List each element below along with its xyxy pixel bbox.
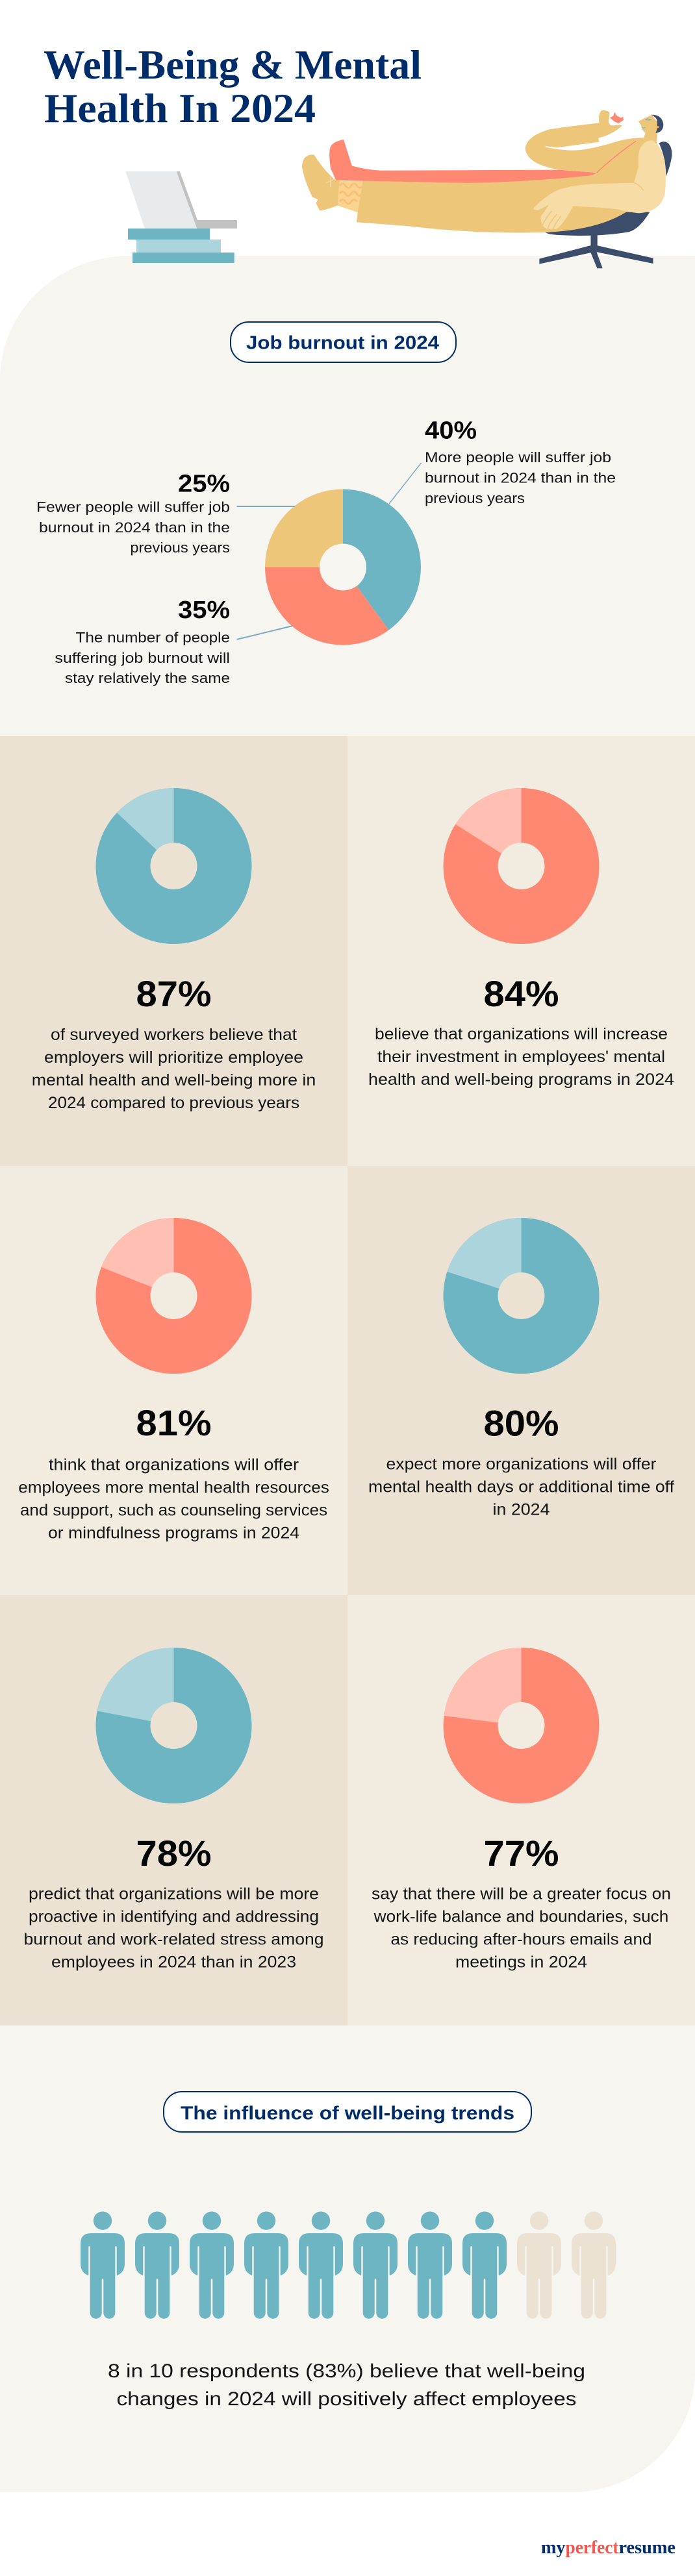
description: 84%: believe that organizations will increase [375, 1025, 668, 1043]
callout: 40%: burnout in 2024 than in the [425, 470, 616, 486]
callout: 25%: burnout in 2024 than in the [39, 519, 230, 536]
heading pill: job burnout [231, 322, 456, 362]
callout: 40%: 40% [425, 417, 477, 444]
callout: 40% [425, 417, 616, 506]
illustration: man reclining in office chair [302, 110, 672, 268]
leader line: 25% [236, 506, 295, 507]
description: 80%: mental health days or additional time off [368, 1478, 674, 1496]
description: 80%: in 2024 [492, 1501, 550, 1519]
description: 78%: proactive in identifying and addressing [29, 1907, 319, 1926]
description: 77% [372, 1885, 671, 1971]
description: 81% [18, 1455, 329, 1542]
heading pill: influence of well-being trends: The influence of well-being trends [181, 2103, 514, 2124]
description: 78%: burnout and work-related stress among [23, 1931, 323, 1949]
donut: 84% [443, 788, 599, 944]
heading pill: influence of well-being trends [164, 2092, 531, 2132]
title [44, 42, 422, 131]
description: 81%: or mindfulness programs in 2024 [48, 1524, 299, 1542]
description: 84%: health and well-being programs in 2024 [368, 1071, 674, 1089]
donut chart: job burnout split [265, 489, 421, 645]
panel: 87% [0, 736, 348, 1166]
callout: 25%: Fewer people will suffer job [36, 499, 230, 515]
panel: 78% [0, 1595, 348, 2025]
description: 80% [368, 1455, 674, 1519]
heading pill: job burnout: Job burnout in 2024 [246, 332, 439, 353]
callout: 40%: More people will suffer job [425, 449, 611, 465]
description: 80%: expect more organizations will offer [386, 1455, 656, 1474]
logo: myperfectresume: my [541, 2538, 565, 2558]
stat: 81%: 81% [136, 1402, 212, 1443]
callout: 35%: suffering job burnout will [55, 650, 230, 666]
description: 77%: work-life balance and boundaries, such [373, 1907, 668, 1926]
description: 87%: mental health and well-being more in [32, 1071, 316, 1089]
title: Well-Being & Mental [44, 42, 422, 88]
donut: 78% [96, 1648, 252, 1803]
description: 87%: employers will prioritize employee [44, 1048, 303, 1067]
leader line: 35% [236, 626, 292, 639]
callout: 35% [55, 597, 230, 686]
callout: 40%: previous years [425, 490, 525, 506]
description: 87%: 2024 compared to previous years [48, 1094, 299, 1112]
description: 78% [23, 1885, 323, 1971]
description: 84% [368, 1025, 674, 1089]
donut: 81% [96, 1218, 252, 1374]
title: Health In 2024 [44, 85, 316, 131]
panel: 77% [348, 1595, 695, 2025]
stat: 80%: 80% [483, 1402, 559, 1444]
logo: myperfectresume: perfect [565, 2538, 619, 2558]
callout: 25%: 25% [178, 470, 230, 497]
callout: 35%: The number of people [75, 630, 230, 645]
closing statement [108, 2360, 585, 2410]
donut: 77% [443, 1648, 599, 1803]
description: 77%: meetings in 2024 [455, 1953, 587, 1971]
description: 78%: employees in 2024 than in 2023 [51, 1953, 296, 1971]
panel: 80% [348, 1166, 695, 1595]
description: 84%: their investment in employees' mental [377, 1048, 665, 1066]
stat: 84%: 84% [483, 973, 559, 1014]
logo: myperfectresume: resume [618, 2538, 676, 2558]
callout: 35%: stay relatively the same [65, 670, 230, 686]
stat: 77%: 77% [483, 1833, 559, 1874]
illustration: laptop on books [125, 171, 237, 263]
pictogram: 8 of 10 people [81, 2211, 616, 2319]
description: 77%: as reducing after-hours emails and [391, 1931, 652, 1949]
description: 81%: employees more mental health resources [18, 1479, 329, 1497]
panel: 81% [0, 1166, 348, 1595]
description: 87% [32, 1026, 316, 1112]
leader line: 40% [389, 463, 421, 504]
stat: 78%: 78% [136, 1833, 212, 1874]
description: 77%: say that there will be a greater focus on [372, 1885, 671, 1903]
stat: 87%: 87% [136, 973, 212, 1014]
panel: 84% [348, 736, 695, 1166]
callout: 25%: previous years [130, 539, 230, 556]
description: 81%: and support, such as counseling services [20, 1501, 327, 1519]
donut: 80% [443, 1218, 599, 1374]
description: 81%: think that organizations will offer [49, 1455, 299, 1474]
callout: 25% [36, 470, 230, 556]
description: 87%: of surveyed workers believe that [51, 1026, 297, 1044]
logo: myperfectresume [541, 2538, 676, 2558]
callout: 35%: 35% [178, 597, 230, 624]
donut: 87% [96, 788, 252, 944]
closing statement: 8 in 10 respondents (83%) believe that well-being [108, 2360, 585, 2382]
description: 78%: predict that organizations will be more [29, 1885, 319, 1903]
closing statement: changes in 2024 will positively affect employees [117, 2388, 577, 2410]
